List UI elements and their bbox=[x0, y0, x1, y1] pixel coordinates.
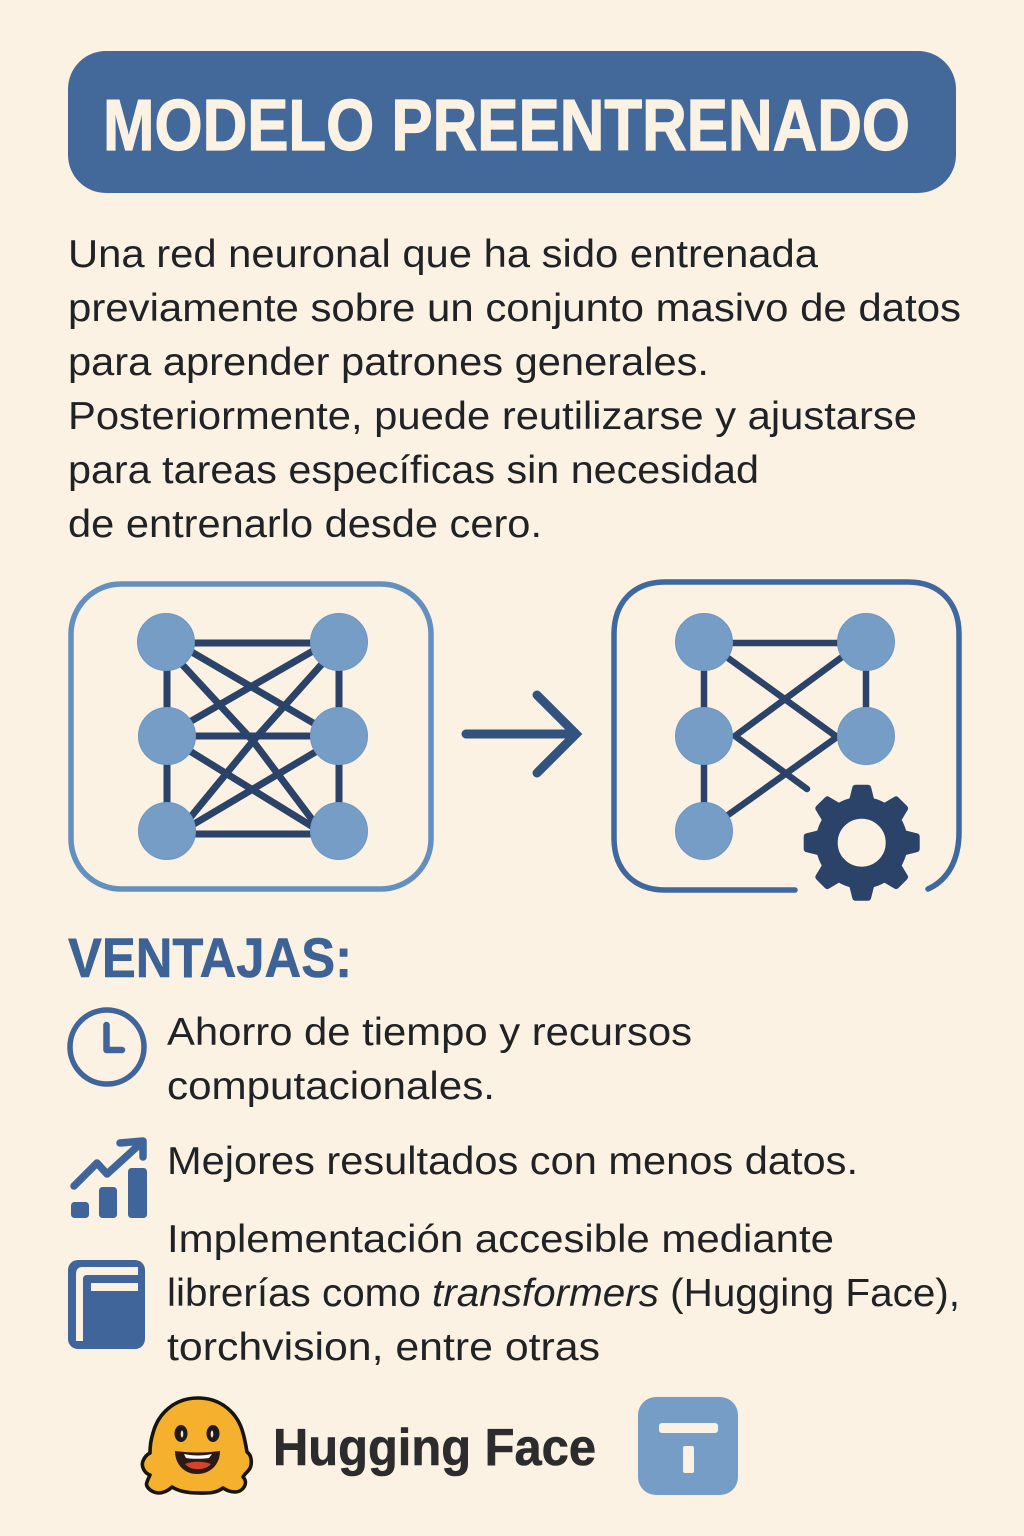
icon: gear bbox=[804, 785, 920, 901]
definition text block: para tareas específicas sin necesidad bbox=[68, 449, 759, 492]
reduced nodes bbox=[676, 614, 894, 860]
title banner: MODELO PREENTRENADO bbox=[103, 86, 910, 166]
advantage: time and resources: computacionales. bbox=[167, 1065, 495, 1108]
icon: growth chart bbox=[71, 1141, 147, 1218]
title banner bbox=[68, 51, 956, 193]
advantage: accessible libraries: Implementación accesible mediante bbox=[167, 1218, 834, 1261]
definition text block: previamente sobre un conjunto masivo de datos bbox=[68, 287, 961, 330]
eyes bbox=[174, 1425, 220, 1442]
definition text block bbox=[68, 233, 961, 546]
network nodes bbox=[138, 614, 368, 860]
advantage: time and resources: Ahorro de tiempo y recursos bbox=[167, 1011, 692, 1054]
definition text block: para aprender patrones generales. bbox=[68, 341, 709, 384]
advantage: accessible libraries: torchvision, entre otras bbox=[167, 1326, 600, 1369]
network connections bbox=[166, 636, 339, 843]
mouth bbox=[175, 1451, 220, 1474]
definition text block: Una red neuronal que ha sido entrenada bbox=[68, 233, 818, 276]
panel: full pretrained network bbox=[71, 584, 431, 889]
advantage: accessible libraries: librerías como transformers (Hugging Face), bbox=[167, 1272, 960, 1315]
brand label: hugging face: Hugging Face bbox=[273, 1419, 596, 1477]
icon: hugging face emoji bbox=[142, 1398, 251, 1493]
icon: book bbox=[68, 1260, 145, 1349]
icon: t logo bbox=[638, 1397, 738, 1495]
arrow bbox=[466, 695, 576, 773]
definition text block: de entrenarlo desde cero. bbox=[68, 503, 542, 546]
panel: fine-tuned network bbox=[614, 582, 959, 901]
heading: ventajas: VENTAJAS: bbox=[68, 926, 352, 989]
advantage: better results: Mejores resultados con menos datos. bbox=[167, 1140, 858, 1183]
advantage: accessible libraries bbox=[167, 1218, 960, 1369]
reduced connections bbox=[704, 642, 866, 831]
icon: clock bbox=[70, 1010, 144, 1084]
definition text block: Posteriormente, puede reutilizarse y ajustarse bbox=[68, 395, 917, 438]
advantage: time and resources bbox=[167, 1011, 692, 1108]
